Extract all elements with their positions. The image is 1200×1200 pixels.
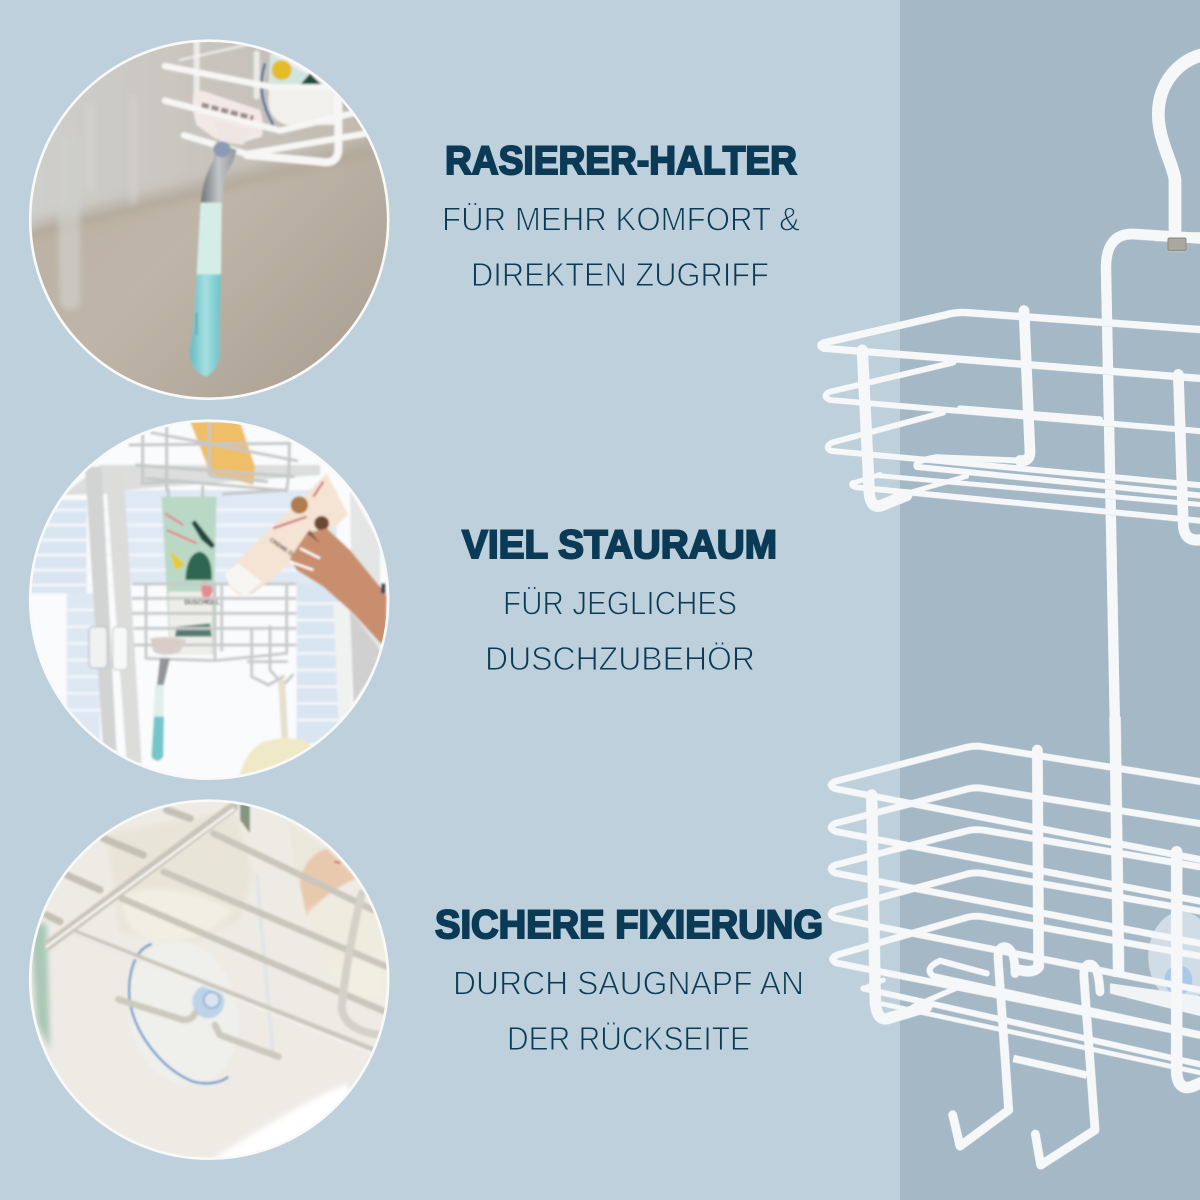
product: upper wire basket [821, 311, 1200, 540]
feature text: fixing [435, 903, 823, 1058]
heading: RASIERER-HALTER [445, 139, 797, 183]
photo circle border: suction cup [30, 801, 388, 1159]
description line 2: DUSCHZUBEHÖR [485, 641, 755, 678]
icon: wire rack [47, 807, 387, 1057]
product: lower wire basket [831, 717, 1200, 1165]
photo circle: suction cup [32, 802, 387, 1158]
description line 1: FÜR JEGLICHES [503, 586, 737, 622]
feature text: storage [462, 523, 777, 678]
icon: green shower gel tube [162, 497, 220, 655]
background: darker blue right panel [900, 0, 1200, 1200]
icon: razor [188, 90, 264, 378]
product: hanging frame with hook [1106, 54, 1200, 729]
icon: suction cup [126, 942, 230, 1086]
icon: sponge [190, 422, 255, 485]
blurred background items [30, 803, 387, 1163]
icon: loofah [238, 679, 312, 775]
icon: cream tube and hand [225, 473, 387, 650]
feature text: razor holder [442, 139, 800, 294]
icon: cream tube and hand: CREME ÖL [268, 537, 297, 560]
window frame [63, 465, 380, 763]
background: light blue panel [0, 0, 900, 1200]
description line 1: DURCH SAUGNAPF AN [453, 966, 804, 1002]
description line 2: DIREKTEN ZUGRIFF [471, 257, 769, 294]
photo circle border: storage space [30, 421, 388, 779]
suction cup [1110, 912, 1200, 1017]
heading: SICHERE FIXIERUNG [435, 903, 823, 947]
icon: razor [150, 637, 187, 761]
heading: VIEL STAURAUM [462, 523, 777, 567]
icon: bottle in basket [261, 53, 340, 125]
icon: upper wire basket [130, 423, 297, 500]
photo circle: razor holder [32, 42, 387, 398]
photo circle: storage space [32, 422, 387, 778]
icon: green shower gel tube: DUSCHGEL [184, 600, 220, 607]
description line 2: DER RÜCKSEITE [507, 1021, 750, 1058]
photo circle border: razor holder [30, 41, 388, 399]
icon: lower wire basket [133, 583, 295, 685]
description line 1: FÜR MEHR KOMFORT & [442, 202, 800, 238]
hook 1 [953, 947, 1015, 1146]
hook 2 [1035, 964, 1100, 1165]
window blinds [30, 490, 340, 743]
icon: wire basket [165, 40, 367, 162]
